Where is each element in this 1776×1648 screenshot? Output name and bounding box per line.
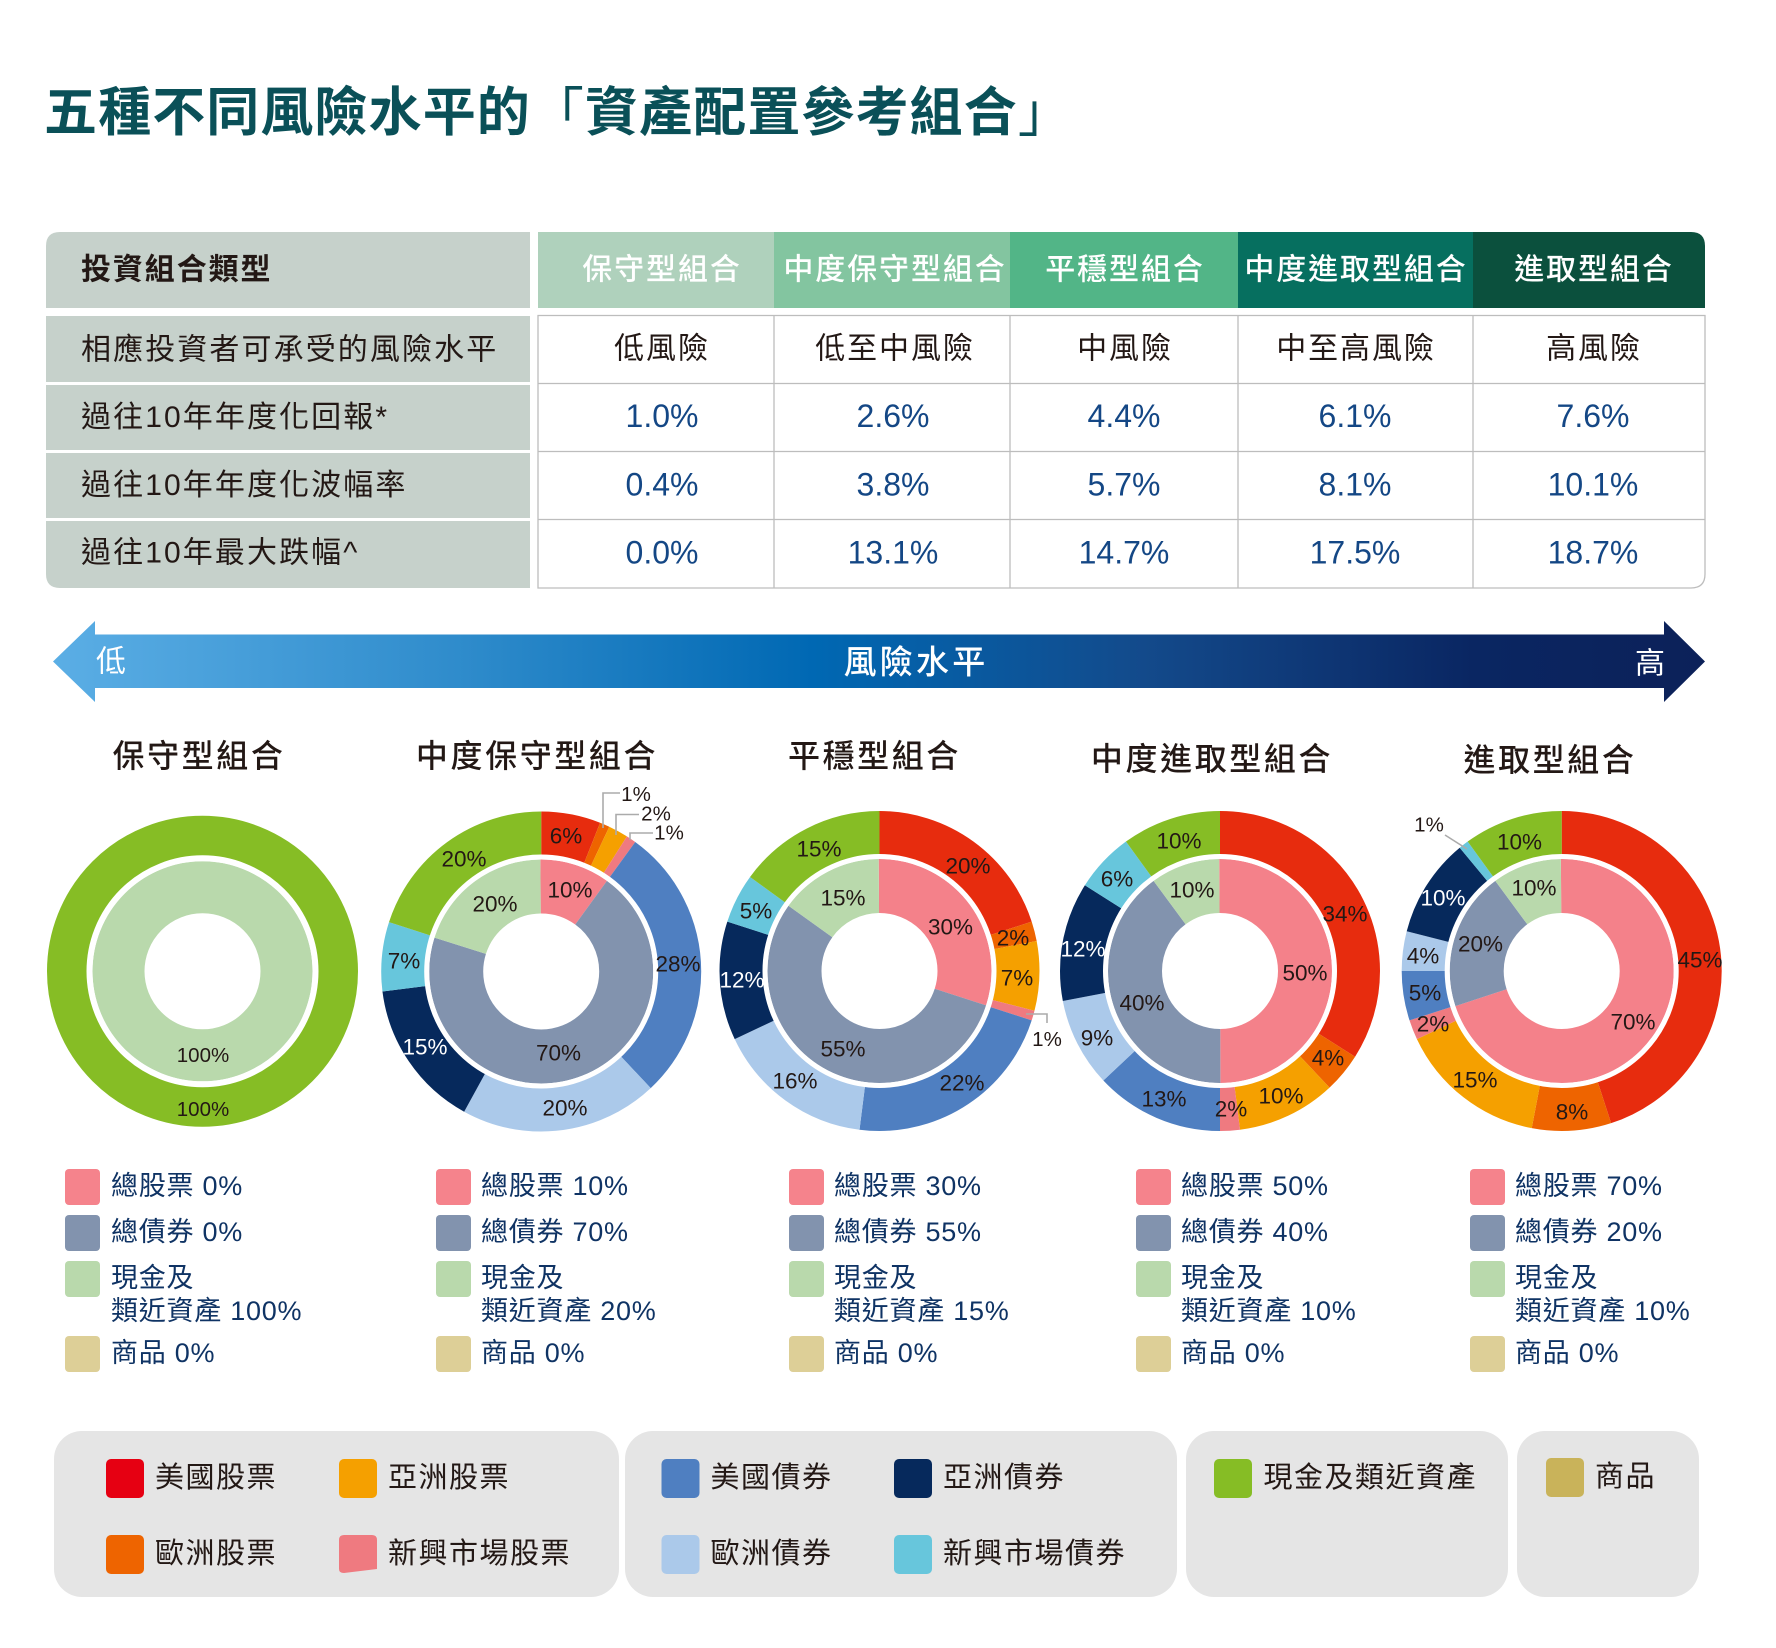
donut chart: [719, 834, 1062, 1108]
legend: 商品 0%: [481, 1338, 585, 1368]
donut chart: 70%: [1610, 1010, 1656, 1034]
table header row label: 投資組合類型: [81, 254, 272, 286]
row: annualised return: 2.6%: [857, 398, 929, 434]
donut chart: 28%: [655, 952, 701, 976]
row: annualised volatility: [46, 453, 1638, 518]
panel: equities key: 新興市場股票: [388, 1537, 571, 1570]
panel: bonds key: [625, 1431, 1177, 1597]
legend: 現金及: [834, 1263, 917, 1293]
heading: 中度進取型組合: [1091, 741, 1333, 777]
panel: bonds key: 亞洲債券: [943, 1461, 1065, 1494]
panel: bonds key: 美國債券: [710, 1461, 833, 1494]
row: annualised return: [46, 385, 1629, 450]
row: maximum drawdown: 0.0%: [626, 534, 698, 570]
legend: 類近資產 100%: [111, 1296, 302, 1326]
row: maximum drawdown: 18.7%: [1548, 534, 1638, 570]
donut chart: 2%: [1215, 1096, 1247, 1122]
donut chart: 10%: [1511, 876, 1557, 900]
donut chart: 4%: [1407, 944, 1439, 968]
panel: equities key: 美國股票: [155, 1461, 277, 1494]
donut chart: 9%: [1081, 1026, 1113, 1050]
header: moderately aggressive: [1238, 232, 1473, 308]
donut chart: 20%: [1458, 932, 1503, 956]
row: annualised volatility: 過往10年年度化波幅率: [81, 469, 407, 502]
row: annualised volatility: 8.1%: [1319, 466, 1391, 502]
donut chart: 10%: [1156, 828, 1202, 854]
donut chart: 1%: [1032, 1028, 1062, 1051]
donut chart: 2%: [997, 926, 1029, 950]
heading: 保守型組合: [112, 738, 286, 774]
donut chart: 1%: [1414, 814, 1444, 836]
donut chart: 5%: [1409, 980, 1441, 1006]
donut chart: 34%: [1322, 902, 1368, 926]
donut chart: 6%: [550, 824, 582, 848]
panel: cash key: [1186, 1431, 1508, 1597]
legend: 類近資產 15%: [834, 1296, 1010, 1326]
donut chart: 10%: [1258, 1084, 1304, 1108]
header: moderately aggressive: 中度進取型組合: [1244, 254, 1468, 286]
arrow: risk level low to high: 風險水平: [844, 644, 988, 680]
legend: [65, 1169, 302, 1372]
row: maximum drawdown: [46, 521, 1638, 588]
header: aggressive: [1473, 232, 1705, 308]
title: 五種不同風險水平的「資產配置參考組合」: [44, 84, 1072, 142]
row: annualised volatility: 10.1%: [1548, 466, 1638, 502]
portfolio: moderately aggressive: [1060, 741, 1368, 1372]
row: acceptable risk level: 低至中風險: [815, 332, 975, 366]
legend: 總股票 70%: [1515, 1171, 1663, 1201]
donut chart: 16%: [772, 1068, 818, 1094]
donut chart: 20%: [945, 854, 991, 878]
portfolio: moderately conservative: [388, 738, 701, 1372]
donut chart: 15%: [796, 836, 842, 862]
donut chart: 20%: [542, 1096, 588, 1120]
row: annualised return: 1.0%: [626, 398, 698, 434]
legend: 現金及: [1515, 1263, 1598, 1293]
donut chart: 15%: [402, 1034, 448, 1060]
panel: equities key: 歐洲股票: [155, 1537, 277, 1570]
legend: 總股票 0%: [111, 1171, 243, 1201]
header: moderately conservative: 中度保守型組合: [783, 254, 1007, 286]
donut chart: 2%: [1417, 1012, 1449, 1036]
donut chart: 8%: [1556, 1100, 1588, 1124]
legend: 總股票 30%: [834, 1171, 982, 1201]
donut chart: 10%: [1497, 830, 1542, 854]
donut chart: 70%: [536, 1040, 581, 1066]
donut chart: 13%: [1141, 1086, 1187, 1112]
table header row label: [46, 232, 530, 308]
header: conservative: [538, 232, 774, 308]
donut chart: 30%: [928, 914, 973, 940]
legend: 商品 0%: [111, 1338, 215, 1368]
portfolio: aggressive: [1407, 742, 1723, 1372]
donut chart: 5%: [740, 898, 772, 924]
donut chart: [1060, 828, 1368, 1122]
panel: equities key: 亞洲股票: [388, 1462, 510, 1494]
donut chart: 2%: [641, 802, 671, 826]
donut chart: 10%: [547, 878, 593, 902]
legend: 類近資產 10%: [1181, 1296, 1357, 1326]
donut chart: 1%: [621, 783, 651, 806]
panel: cash key: 現金及類近資產: [1264, 1461, 1477, 1494]
row: annualised volatility: 5.7%: [1088, 466, 1160, 502]
row: annualised return: 7.6%: [1557, 398, 1629, 434]
portfolio: balanced: [719, 738, 1062, 1372]
legend: 現金及: [111, 1263, 194, 1293]
legend: 類近資產 10%: [1515, 1296, 1691, 1326]
donut chart: 20%: [441, 846, 487, 872]
legend: 總債券 20%: [1515, 1217, 1663, 1247]
legend: 總股票 50%: [1181, 1171, 1329, 1201]
donut chart: 7%: [388, 948, 420, 974]
panel: commodities key: 商品: [1595, 1460, 1656, 1493]
row: annualised volatility: 0.4%: [626, 466, 698, 502]
panel: bonds key: 歐洲債券: [710, 1537, 833, 1570]
row: annualised return: 6.1%: [1319, 398, 1391, 434]
donut chart: 15%: [1452, 1068, 1498, 1092]
legend: [1470, 1169, 1691, 1372]
panel: equities key: [54, 1431, 619, 1597]
header: aggressive: 進取型組合: [1514, 254, 1674, 286]
row: maximum drawdown: 過往10年最大跌幅^: [81, 536, 359, 570]
row: annualised volatility: 3.8%: [857, 466, 929, 502]
row: annualised return: 4.4%: [1088, 398, 1160, 434]
panel: commodities key: [1517, 1431, 1699, 1597]
donut chart: 1%: [654, 822, 684, 844]
donut chart: 12%: [1060, 936, 1106, 962]
legend: 現金及: [1181, 1263, 1264, 1293]
donut chart: 6%: [1101, 866, 1133, 892]
donut chart: 20%: [472, 892, 518, 916]
legend: 總債券 40%: [1181, 1217, 1329, 1247]
portfolio: conservative: [65, 738, 338, 1372]
legend: 總股票 10%: [481, 1171, 629, 1201]
row: acceptable risk level: 低風險: [614, 332, 710, 366]
legend: 商品 0%: [1515, 1338, 1619, 1368]
donut chart: 10%: [1169, 878, 1215, 902]
donut chart: 7%: [1001, 966, 1033, 990]
legend: 總債券 0%: [111, 1217, 243, 1247]
donut chart: 22%: [939, 1070, 985, 1096]
donut chart: 100%: [177, 1044, 229, 1067]
donut chart: [388, 783, 701, 1120]
row: acceptable risk level: 高風險: [1546, 332, 1642, 366]
row: acceptable risk level: 相應投資者可承受的風險水平: [81, 334, 498, 366]
arrow: risk level low to high: 低: [96, 646, 126, 678]
legend: [789, 1169, 1010, 1372]
donut chart: 45%: [1677, 948, 1723, 972]
arrow: risk level low to high: [53, 621, 1705, 702]
row: acceptable risk level: [46, 316, 1642, 382]
header: conservative: 保守型組合: [582, 254, 742, 286]
donut chart: 15%: [820, 886, 866, 910]
donut chart: 12%: [719, 968, 765, 992]
legend: 總債券 70%: [481, 1217, 629, 1247]
row: annualised return: 過往10年年度化回報*: [81, 401, 389, 434]
heading: 中度保守型組合: [416, 738, 658, 774]
donut chart: [1407, 814, 1723, 1124]
header: moderately conservative: [774, 232, 1010, 308]
panel: bonds key: 新興市場債券: [943, 1537, 1126, 1570]
donut chart: 100%: [177, 1098, 229, 1121]
legend: 商品 0%: [1181, 1338, 1285, 1368]
legend: 商品 0%: [834, 1338, 938, 1368]
header: balanced: [1010, 232, 1238, 308]
donut chart: 40%: [1119, 990, 1165, 1016]
donut chart: 55%: [820, 1036, 866, 1062]
row: maximum drawdown: 17.5%: [1310, 534, 1400, 570]
legend: 總債券 55%: [834, 1217, 982, 1247]
table grid: [538, 316, 1705, 588]
donut chart: 10%: [1420, 886, 1466, 910]
heading: 進取型組合: [1463, 742, 1637, 778]
donut chart: 50%: [1282, 960, 1328, 986]
legend: [1136, 1169, 1357, 1372]
donut chart: [68, 836, 338, 1121]
arrow: risk level low to high: 高: [1635, 648, 1665, 680]
header: balanced: 平穩型組合: [1045, 254, 1205, 286]
row: maximum drawdown: 14.7%: [1079, 534, 1169, 570]
legend: 現金及: [481, 1263, 564, 1293]
row: acceptable risk level: 中至高風險: [1276, 332, 1436, 366]
legend: [436, 1169, 657, 1372]
donut chart: 4%: [1312, 1046, 1344, 1070]
row: acceptable risk level: 中風險: [1077, 332, 1173, 366]
heading: 平穩型組合: [788, 738, 961, 774]
row: maximum drawdown: 13.1%: [848, 534, 938, 570]
legend: 類近資產 20%: [481, 1296, 657, 1326]
comparison table: [46, 232, 1705, 588]
